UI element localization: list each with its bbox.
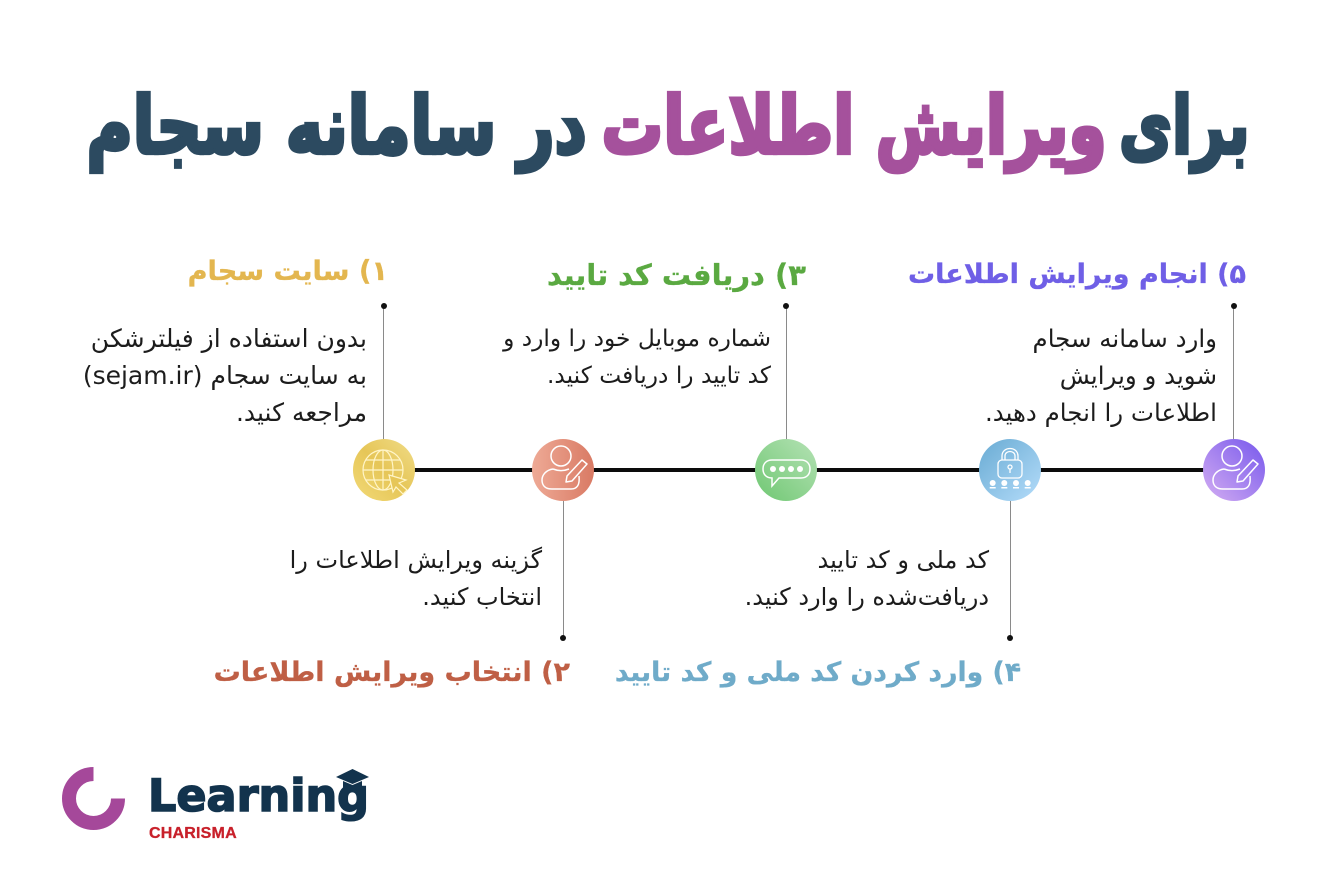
icon: padlock with code (979, 439, 1041, 501)
logo: Learning Charisma (62, 767, 369, 842)
step 3 text (502, 325, 771, 389)
step 1 heading: ۱) سایت سجام (188, 256, 388, 287)
icon: user with pencil (red) (532, 439, 594, 501)
logo subtitle: CHARISMA (149, 825, 237, 842)
title: برای (1120, 79, 1250, 172)
title: در سامانه سجام (87, 79, 587, 172)
step 1 text: به سایت سجام (sejam.ir) (83, 361, 367, 390)
icon: speech bubble with code (755, 439, 817, 501)
logo wordmark: Learning (148, 771, 369, 822)
step 5 heading: ۵) انجام ویرایش اطلاعات (908, 259, 1246, 290)
step 2 text: گزینه ویرایش اطلاعات را (290, 546, 542, 574)
step 2 text (290, 546, 542, 611)
step 2 text: انتخاب کنید. (422, 583, 542, 611)
step 4 heading: ۴) وارد کردن کد ملی و کد تایید (615, 657, 1021, 688)
logo graduation cap (336, 769, 369, 788)
step 5 text (985, 324, 1217, 427)
step 1 text: بدون استفاده از فیلترشکن (91, 324, 367, 353)
title (87, 79, 1250, 175)
step 4 text: کد ملی و کد تایید (818, 546, 989, 574)
step 5 text: شوید و ویرایش (1060, 361, 1217, 390)
step 4 text (745, 546, 990, 611)
logo mark (62, 767, 125, 830)
step 1 text: مراجعه کنید. (236, 398, 367, 427)
icon: user with pencil (purple) (1203, 439, 1265, 501)
step 4 text: دریافت‌شده را وارد کنید. (745, 583, 989, 611)
step 5 text: اطلاعات را انجام دهید. (985, 398, 1217, 427)
timeline line (384, 468, 1234, 472)
icon: globe with cursor (353, 439, 415, 501)
step 3 text: شماره موبایل خود را وارد و (503, 325, 771, 352)
step 2 heading: ۲) انتخاب ویرایش اطلاعات (214, 657, 570, 688)
step 3 heading: ۳) دریافت کد تایید (547, 258, 806, 292)
title: ویرایش اطلاعات (602, 79, 1107, 172)
step 1 text (83, 324, 367, 427)
step 5 text: وارد سامانه سجام (1033, 324, 1217, 353)
step 3 text: کد تایید را دریافت کنید. (547, 362, 771, 389)
